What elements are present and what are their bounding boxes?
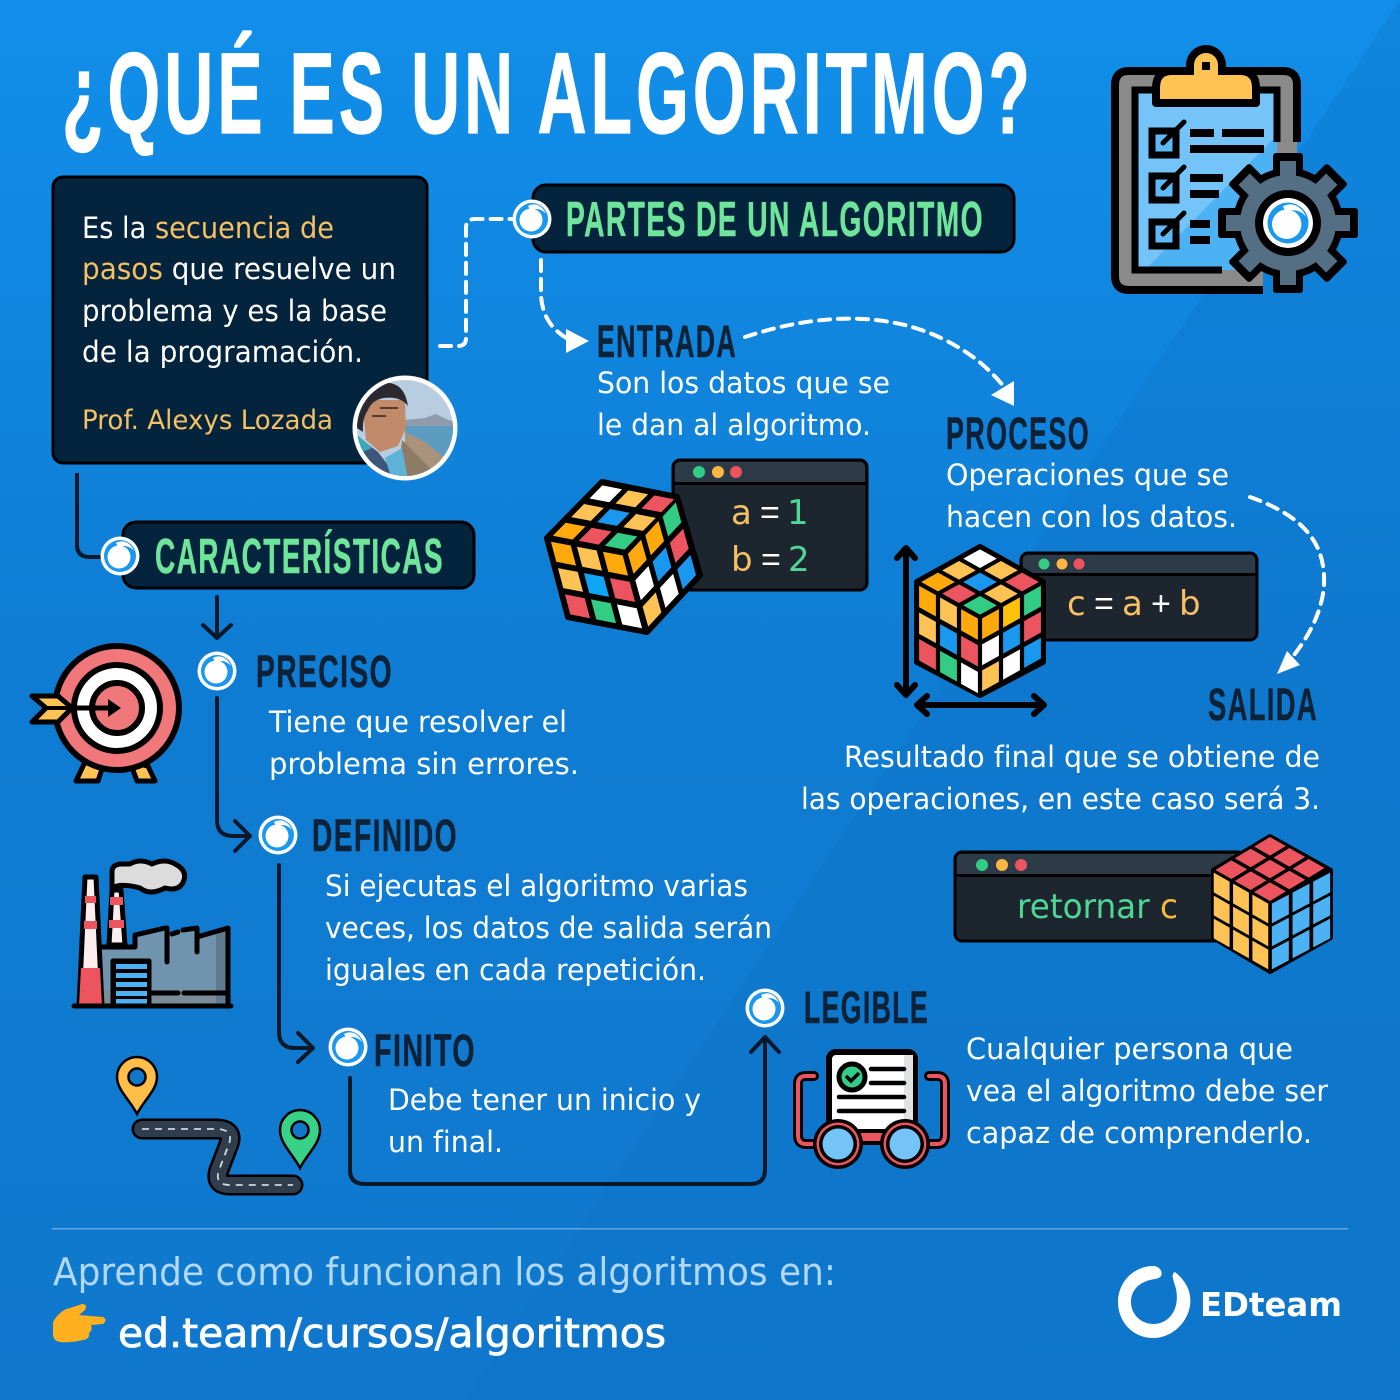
entrada text: Son los datos que se: [597, 366, 890, 400]
definition text: problema y es la base: [82, 294, 387, 328]
finito text: Debe tener un inicio y: [388, 1083, 701, 1117]
salida text: [801, 740, 1320, 816]
logo: EDteam: EDteam: [1200, 1285, 1342, 1324]
salida text: las operaciones, en este caso será 3.: [801, 782, 1320, 816]
heading: partes de un algoritmo: PARTES DE UN ALGORITMO: [566, 193, 984, 247]
legible heading: LEGIBLE: [804, 982, 929, 1033]
legible text: Cualquier persona que: [966, 1032, 1293, 1066]
code window: entrada: a: [731, 493, 752, 533]
icon: preciso marker: [198, 652, 236, 690]
icon: clipboard with gear: [1115, 45, 1358, 293]
legible text: capaz de comprenderlo.: [966, 1116, 1312, 1150]
proceso text: Operaciones que se: [946, 458, 1229, 492]
arrow: proceso to salida: [1250, 497, 1324, 674]
connector: definition to caracteristicas: [77, 473, 102, 557]
entrada heading: ENTRADA: [597, 316, 737, 367]
arrow: preciso to definido: [217, 698, 250, 851]
code window: proceso: =: [1094, 585, 1114, 623]
icon: partes marker: [512, 200, 552, 238]
icon: definido marker: [258, 816, 298, 854]
preciso text: [268, 705, 579, 781]
arrow: entrada to proceso: [745, 319, 1014, 406]
code window: entrada: b: [731, 540, 753, 580]
arrow: finito to legible: [350, 1037, 779, 1184]
icon: document with glasses: [798, 1052, 945, 1169]
heading: caracteristicas: [123, 522, 474, 588]
definition text: pasos que resuelve un: [82, 252, 396, 286]
code window: entrada: 2: [788, 540, 810, 580]
author photo: [350, 375, 460, 485]
code window: proceso: c: [1067, 584, 1086, 624]
connector: definition to partes: [440, 219, 512, 346]
author name: Prof. Alexys Lozada: [82, 405, 333, 436]
salida heading: SALIDA: [1208, 679, 1318, 730]
icon: rubik cube with arrows: [897, 547, 1044, 714]
code window: proceso: a: [1122, 584, 1143, 624]
finito text: un final.: [388, 1125, 503, 1159]
code window: entrada: =: [761, 541, 781, 579]
preciso text: problema sin errores.: [269, 747, 579, 781]
code window: proceso: b: [1179, 584, 1201, 624]
panel: definition: [53, 177, 427, 463]
definido text: iguales en cada repetición.: [325, 953, 706, 987]
code window: salida: retornar c: [1017, 887, 1178, 927]
code window: entrada: =: [760, 494, 780, 532]
definido heading: DEFINIDO: [312, 810, 458, 861]
entrada text: [597, 366, 890, 442]
definition text: [82, 211, 396, 369]
finito heading: FINITO: [374, 1025, 476, 1076]
logo: EDteam: [1118, 1266, 1342, 1338]
definido text: [325, 869, 772, 987]
code window: entrada: [673, 460, 867, 590]
finito text: [388, 1083, 701, 1159]
code window: proceso: +: [1151, 585, 1171, 623]
heading: caracteristicas: CARACTERÍSTICAS: [155, 530, 444, 584]
footer divider: [52, 1228, 1348, 1230]
icon: rubik cube solved: [1213, 836, 1331, 972]
arrow: definido to finito: [279, 865, 313, 1062]
definition text: de la programación.: [82, 335, 363, 369]
proceso text: [946, 458, 1237, 534]
legible text: vea el algoritmo debe ser: [966, 1074, 1329, 1108]
legible text: [966, 1032, 1329, 1150]
icon: legible marker: [746, 988, 784, 1028]
icon: factory: [74, 861, 231, 1006]
proceso text: hacen con los datos.: [946, 500, 1237, 534]
icon: road with pins: [117, 1057, 320, 1185]
icon: target: [32, 646, 179, 781]
heading: partes de un algoritmo: [533, 185, 1014, 252]
definido text: Si ejecutas el algoritmo varias: [325, 869, 748, 903]
footer link: ed.team/cursos/algoritmos: [118, 1311, 666, 1357]
definition text: Es la secuencia de: [82, 211, 334, 245]
entrada text: le dan al algoritmo.: [597, 408, 871, 442]
arrow: partes to entrada: [541, 260, 589, 353]
proceso heading: PROCESO: [946, 408, 1090, 459]
footer call to action: Aprende como funcionan los algoritmos en:: [53, 1250, 836, 1294]
icon: finito marker: [328, 1028, 368, 1066]
preciso text: Tiene que resolver el: [268, 705, 567, 739]
code window: entrada: 1: [787, 493, 809, 533]
code window: proceso: [1021, 553, 1257, 640]
icon: rubik cube tilted: [547, 482, 700, 632]
arrow: caracteristicas to preciso: [203, 597, 231, 638]
arrows: dimensions: [897, 548, 1044, 714]
icon: caracteristicas marker: [100, 536, 140, 576]
salida text: Resultado final que se obtiene de: [844, 740, 1320, 774]
code window: salida: [955, 852, 1245, 941]
preciso heading: PRECISO: [256, 646, 393, 697]
definido text: veces, los datos de salida serán: [325, 911, 772, 945]
icon: pointing hand: [53, 1304, 106, 1342]
